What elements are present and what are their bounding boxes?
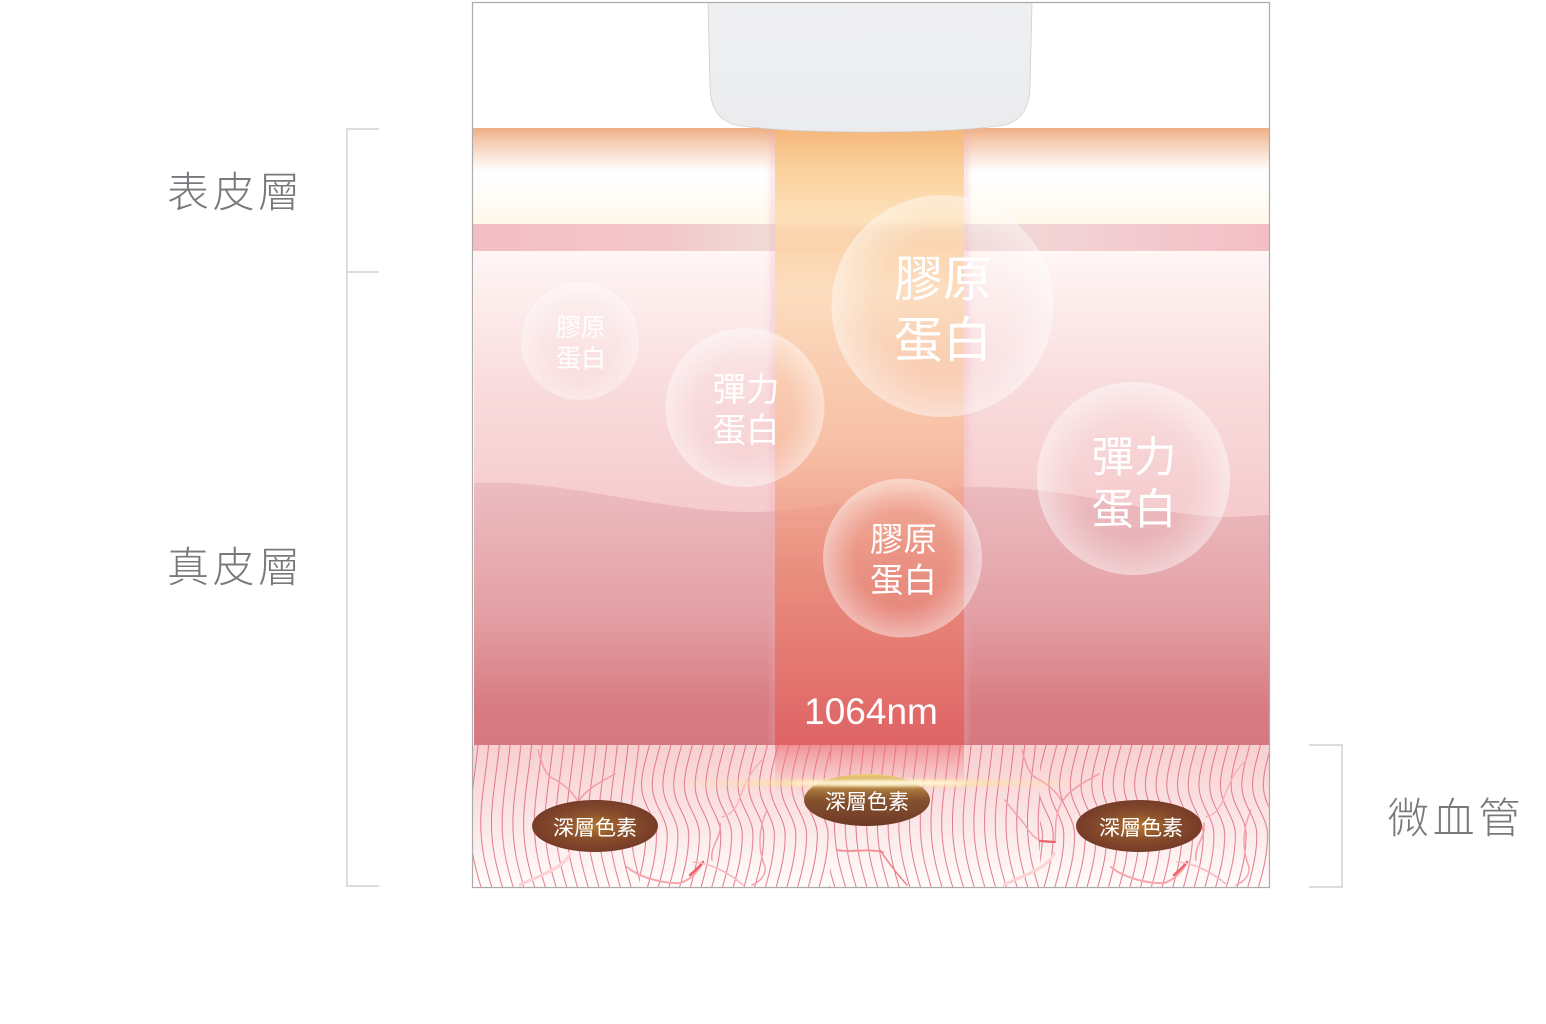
bubble: elastin left: 蛋白 xyxy=(712,413,780,450)
label: epidermis: 表皮層 xyxy=(167,169,304,216)
laser beam: 1064nm column xyxy=(775,128,964,745)
veins: right group xyxy=(1004,750,1251,885)
bubble: elastin left: 彈力 xyxy=(712,372,780,409)
pigment: right: 深層色素 xyxy=(1099,817,1183,840)
bracket: capillaries xyxy=(1309,745,1342,887)
pigment: right xyxy=(1076,800,1202,852)
bubble: elastin right xyxy=(1037,382,1230,575)
pigment: center with flare xyxy=(684,774,1071,826)
wavelength label: 1064nm xyxy=(804,691,938,732)
bubble: collagen large: 蛋白 xyxy=(894,314,992,368)
pigment: left xyxy=(532,800,658,852)
laser beam: fade in capillary zone xyxy=(775,745,964,793)
device head xyxy=(708,2,1032,132)
layer: epidermis xyxy=(473,128,1269,224)
laser beam: wave showing through xyxy=(474,482,1269,745)
veins: left group xyxy=(520,750,907,885)
bubble: collagen small: 膠原 xyxy=(556,314,606,342)
bubble: collagen large xyxy=(832,195,1054,417)
layer: upper dermis xyxy=(474,251,1269,521)
diagram frame xyxy=(472,2,1270,888)
layer: lower dermis wave xyxy=(474,482,1269,745)
wavy capillary lines xyxy=(473,745,1269,887)
bracket: dermis xyxy=(347,272,379,886)
bubble: elastin right: 彈力 xyxy=(1091,435,1177,482)
bubble: collagen in beam: 膠原 xyxy=(870,522,937,559)
illustration: skin cross-section with 1064nm laser xyxy=(169,2,1518,888)
bubble: collagen large: 膠原 xyxy=(894,253,992,307)
bubble: collagen in beam: 蛋白 xyxy=(870,563,937,600)
layer: capillary zone xyxy=(473,745,1269,887)
bubble: collagen in beam xyxy=(823,478,982,638)
bubble: collagen small xyxy=(521,282,639,400)
pigment: left: 深層色素 xyxy=(553,817,637,840)
bubble: elastin left xyxy=(666,328,824,487)
pigment: center with flare: 深層色素 xyxy=(825,791,909,814)
laser beam: soft edges xyxy=(771,132,968,745)
layer: pink basal stripe xyxy=(473,224,1269,251)
label: capillaries: 微血管 xyxy=(1387,795,1524,842)
panel: skin diagram xyxy=(473,2,1269,887)
bubble: elastin right: 蛋白 xyxy=(1091,487,1177,534)
bracket: epidermis xyxy=(347,129,379,272)
bubble: collagen small: 蛋白 xyxy=(556,345,606,373)
label: dermis: 真皮層 xyxy=(167,544,304,591)
